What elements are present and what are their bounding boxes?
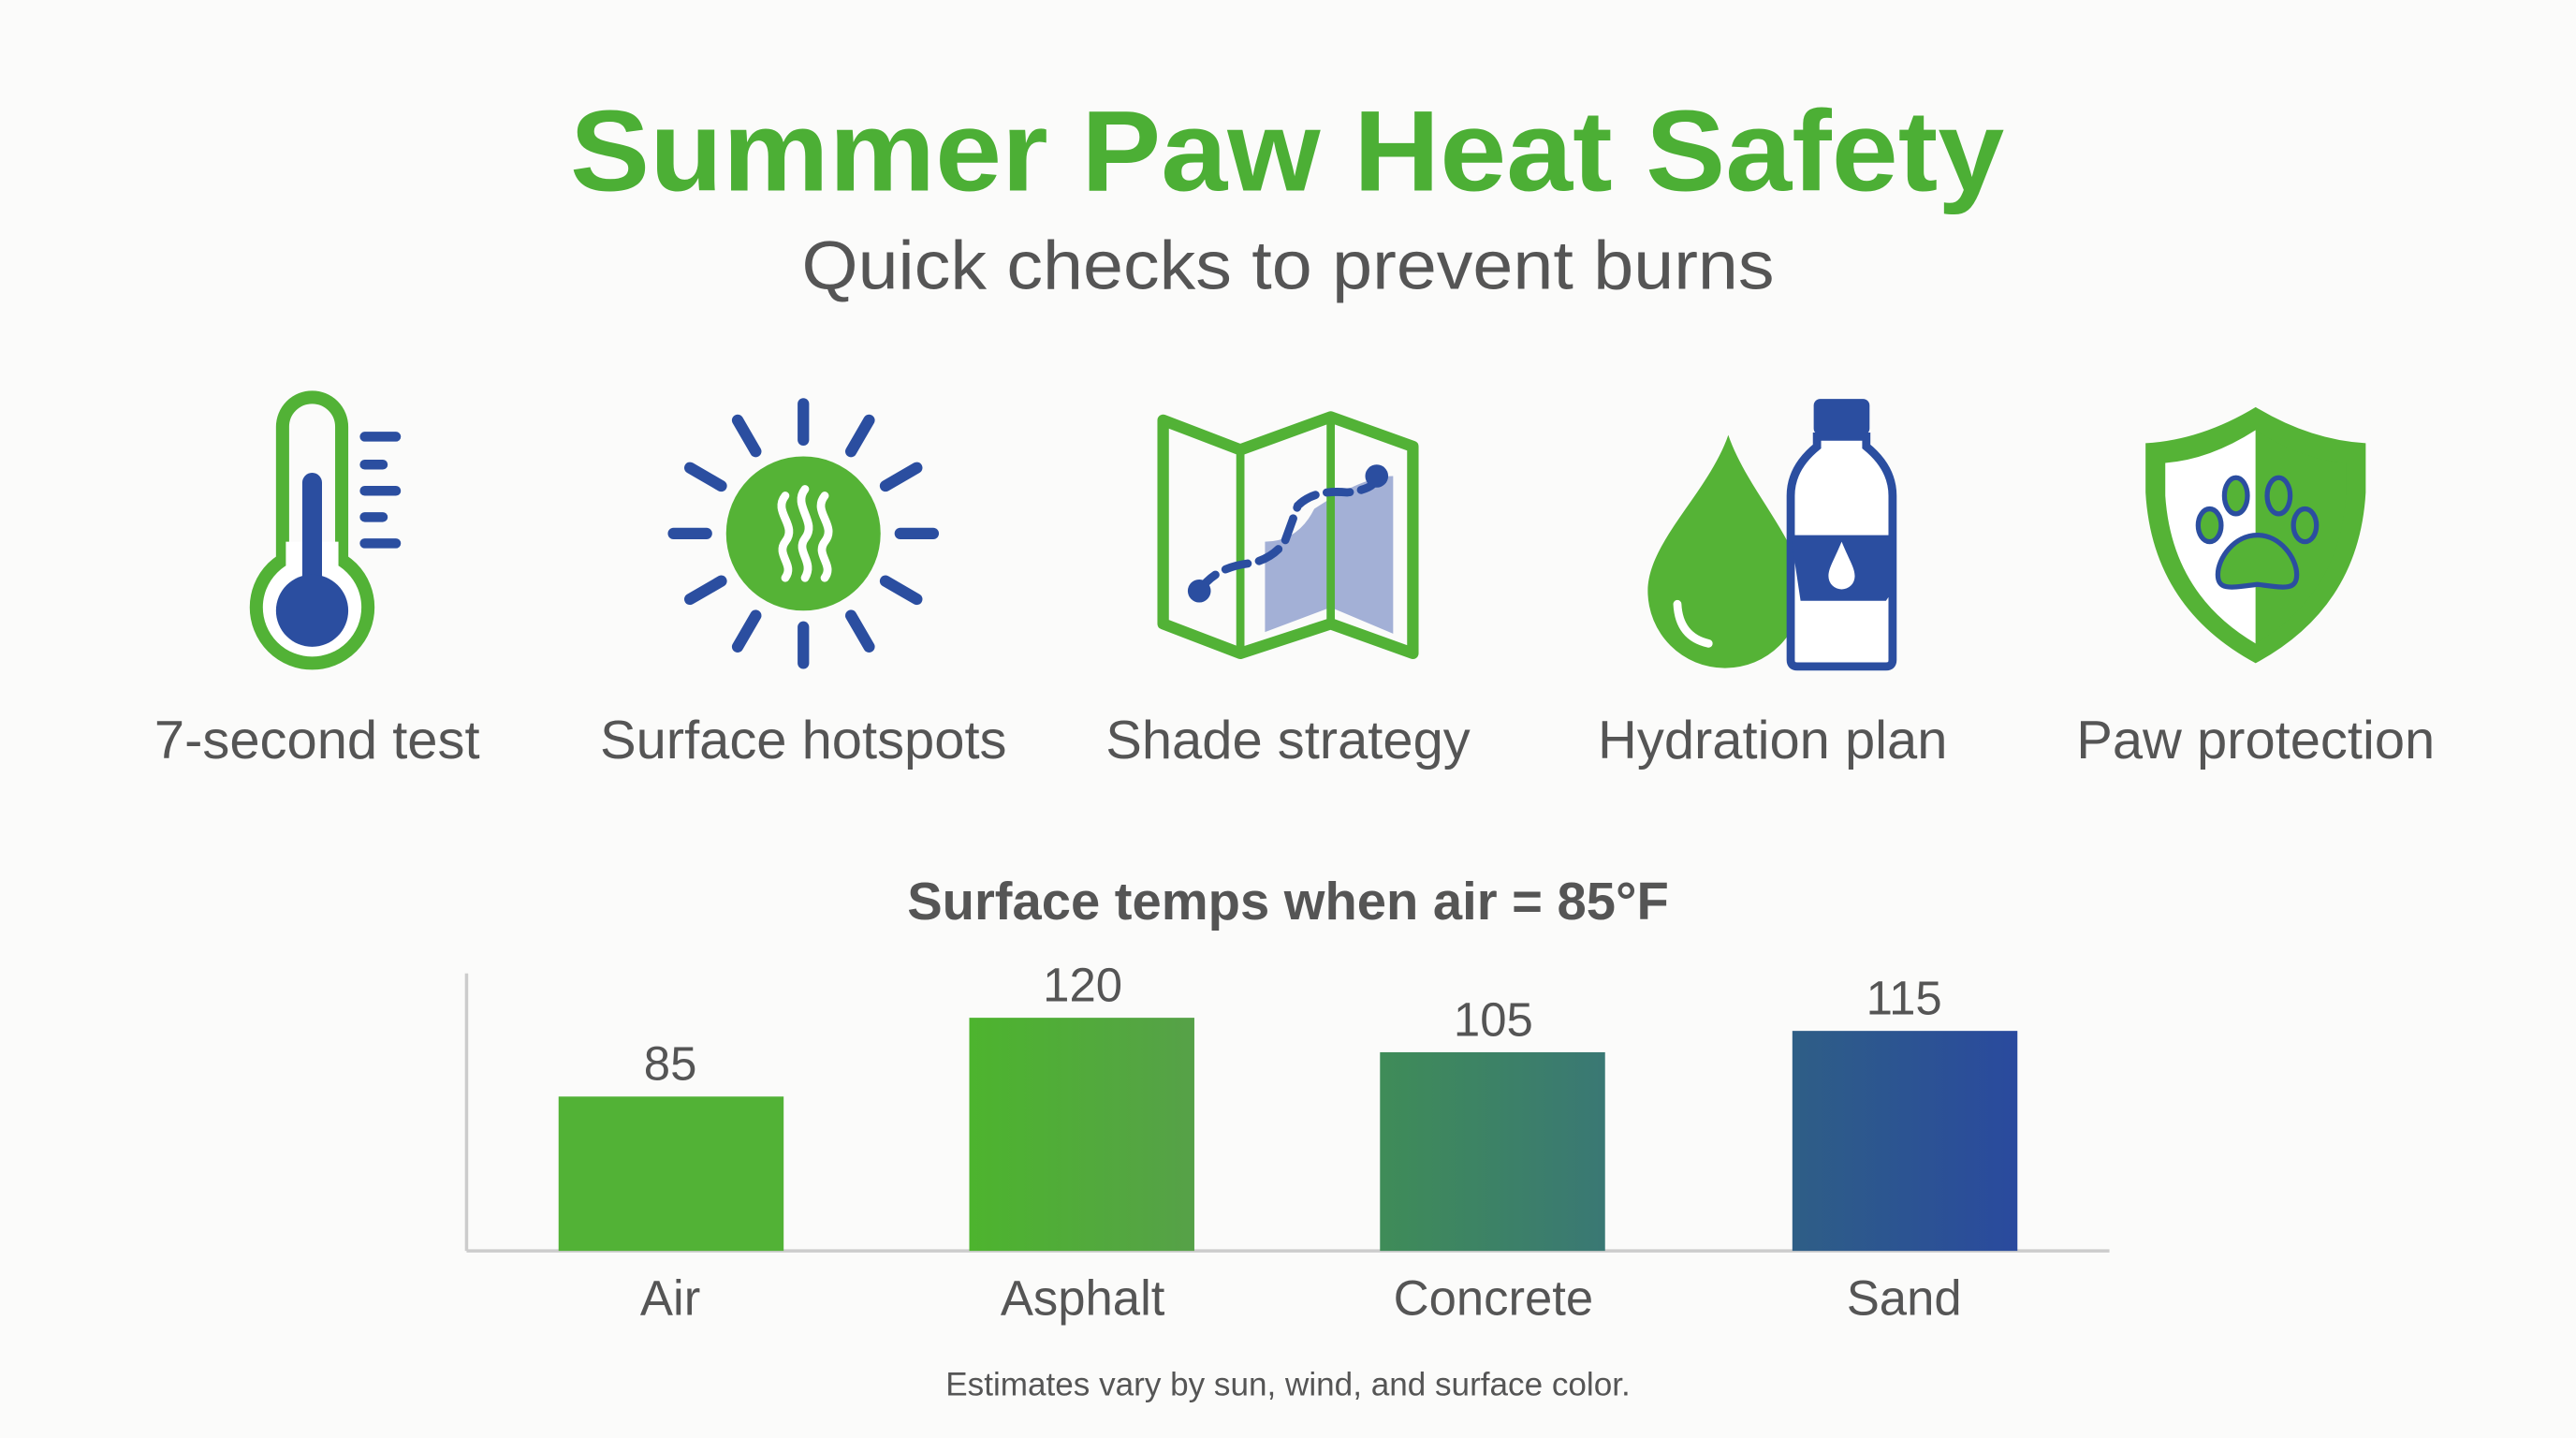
bar: Sand: Sand [1847,1271,1962,1326]
label: hydration plan: Hydration plan [1598,711,1947,770]
icon: map [1164,417,1412,653]
footnote: Estimates vary by sun, wind, and surface color. [945,1366,1631,1402]
bar: Sand [1793,972,2017,1326]
bar: Asphalt: 120 [1043,959,1122,1012]
icon: thermometer [256,397,396,663]
bar: Sand: 115 [1866,972,1942,1025]
bar: Concrete: Concrete [1394,1271,1593,1326]
chart title: Surface temps when air = 85°F [907,872,1669,931]
icon: drop and bottle [1647,399,1893,668]
bar: Air [559,1037,783,1326]
icon: shield with paw [2145,407,2365,663]
bar: Asphalt: Asphalt [1001,1271,1165,1326]
subtitle: Quick checks to prevent burns [801,227,1775,304]
label: surface hotspots: Surface hotspots [600,711,1007,770]
label: shade strategy: Shade strategy [1105,711,1471,770]
bar: Asphalt [970,959,1194,1326]
bar chart [466,959,2110,1326]
bar: Air: 85 [644,1037,696,1091]
icon: sun [674,404,933,663]
bar: Air: Air [640,1271,700,1326]
title: Summer Paw Heat Safety [570,87,2004,215]
bar: Concrete: 105 [1454,992,1533,1046]
label: 7-second test: 7-second test [154,711,480,770]
label: paw protection: Paw protection [2076,711,2435,770]
bar: Concrete [1380,992,1605,1326]
